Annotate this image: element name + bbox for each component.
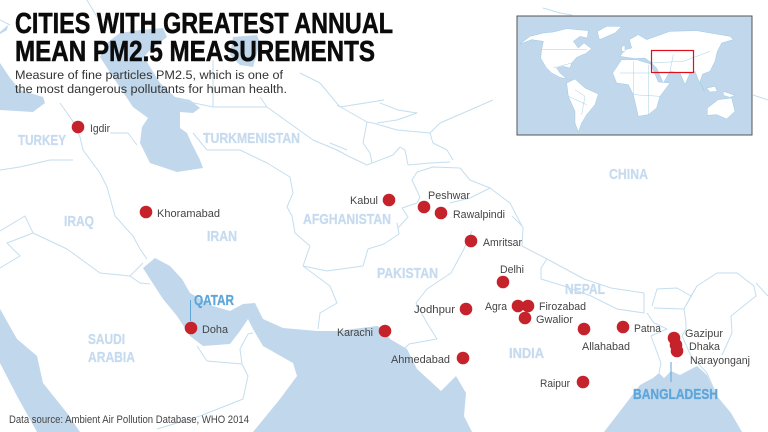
- city markers and labels: Delhi: [500, 264, 524, 276]
- city markers and labels: Igdir: [90, 123, 110, 135]
- city markers and labels: Amritsar: [483, 237, 522, 249]
- title: CITIES WITH GREATEST ANNUAL: [15, 8, 393, 40]
- australia: [707, 98, 735, 119]
- country labels: IRAQ: [64, 213, 94, 230]
- city markers and labels: Rawalpindi: [453, 209, 505, 221]
- north america: [520, 29, 592, 79]
- caspian sea: [100, 28, 203, 172]
- title: MEAN PM2.5 MEASUREMENTS: [15, 36, 375, 68]
- city markers and labels: Firozabad: [539, 301, 586, 313]
- red sea: [0, 309, 80, 432]
- city markers and labels: Peshwar: [428, 190, 470, 202]
- city markers and labels: Doha: [202, 324, 229, 336]
- city markers and labels: Jodhpur: [414, 304, 455, 316]
- country labels: ARABIA: [88, 349, 135, 366]
- country labels: SAUDI: [88, 331, 125, 348]
- country labels: TURKMENISTAN: [203, 130, 300, 147]
- subtitle: the most dangerous pollutants for human health.: [15, 82, 287, 96]
- inset world map: [517, 16, 752, 135]
- subtitle: [15, 68, 287, 96]
- city markers and labels: Narayonganj: [690, 355, 750, 367]
- black sea: [0, 25, 45, 112]
- country labels: AFGHANISTAN: [303, 211, 391, 228]
- data source: Data source: Ambient Air Pollution Database, WHO 2014: [9, 414, 249, 426]
- persian gulf and arabian sea: [143, 258, 472, 432]
- title: [15, 8, 393, 68]
- country labels: CHINA: [609, 166, 648, 183]
- highlighted label: Bangladesh: BANGLADESH: [633, 386, 718, 403]
- city markers and labels: Patna: [634, 323, 662, 335]
- city markers and labels: Khoramabad: [157, 208, 220, 220]
- country labels: [18, 130, 648, 366]
- city markers and labels: [72, 121, 750, 390]
- greenland: [597, 26, 622, 40]
- bay of bengal: [604, 366, 742, 432]
- africa: [613, 60, 670, 116]
- highlighted label: Qatar: [190, 292, 234, 321]
- southeast asia islands: [707, 86, 735, 97]
- country labels: NEPAL: [565, 281, 605, 298]
- city markers and labels: Ahmedabad: [391, 354, 450, 366]
- highlighted label: Qatar: QATAR: [194, 292, 234, 309]
- city markers and labels: Gazipur: [685, 328, 723, 340]
- city markers and labels: Agra: [485, 301, 508, 313]
- south america: [567, 79, 598, 132]
- city markers and labels: Karachi: [337, 327, 373, 339]
- uk: [622, 45, 625, 51]
- city markers and labels: Kabul: [350, 195, 378, 207]
- inset country lines: [542, 50, 710, 115]
- country labels: IRAN: [207, 228, 237, 245]
- country labels: PAKISTAN: [377, 265, 438, 282]
- country labels: TURKEY: [18, 132, 66, 149]
- inset locator box: [652, 50, 694, 72]
- eurasia: [620, 31, 733, 91]
- city markers and labels: Raipur: [540, 378, 570, 390]
- city markers and labels: Gwalior: [536, 314, 573, 326]
- aral sea: [230, 35, 260, 67]
- city markers and labels: Dhaka: [689, 341, 721, 353]
- city markers and labels: Allahabad: [582, 341, 630, 353]
- highlighted label: Bangladesh: [633, 362, 718, 403]
- country labels: INDIA: [509, 345, 544, 362]
- subtitle: Measure of fine particles PM2.5, which is one of: [15, 68, 284, 82]
